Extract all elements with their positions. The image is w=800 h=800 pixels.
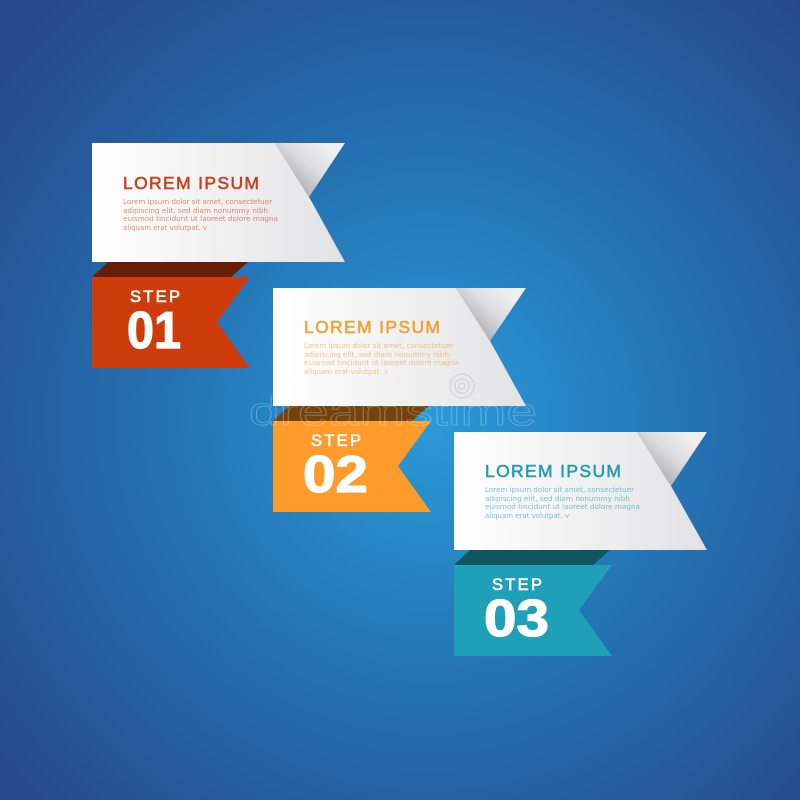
body text 02: euismod tincidunt ut laoreet dolore magna xyxy=(304,359,459,367)
card 03 xyxy=(454,432,707,550)
ribbon shadow 01 xyxy=(92,262,248,277)
heading 01: LOREM IPSUM xyxy=(123,173,259,193)
step number 02: 02 xyxy=(303,446,368,504)
step 03 group xyxy=(454,432,707,656)
watermark: dreamstime xyxy=(249,390,537,434)
body text 03: adipiscing elit, sed diam nonummy nibh xyxy=(485,495,630,503)
body text 01: aliquam erat volutpat. v xyxy=(123,224,207,232)
body text 01: Lorem ipsum dolor sit amet, consectetuer xyxy=(123,198,272,206)
body text 03 xyxy=(485,486,640,520)
body text 01: euismod tincidunt ut laoreet dolore magna xyxy=(123,215,278,223)
card 01 xyxy=(92,143,345,262)
ribbon 03 xyxy=(454,565,612,656)
step 02 group xyxy=(273,288,526,512)
step label 02: STEP xyxy=(311,432,361,450)
step 01 group xyxy=(92,143,345,368)
ribbon shadow 03 xyxy=(454,550,610,565)
step number 03: 03 xyxy=(484,590,549,648)
fold 02 xyxy=(456,288,526,341)
body text 02: Lorem ipsum dolor sit amet, consectetuer xyxy=(304,342,453,350)
ribbon 01 xyxy=(92,277,250,368)
fold 01 xyxy=(275,143,345,197)
card 02 xyxy=(273,288,526,406)
ribbon shadow 02 xyxy=(273,406,429,421)
step label 03: STEP xyxy=(492,576,542,594)
body text 01 xyxy=(123,198,278,232)
step label 01: STEP xyxy=(130,288,180,306)
body text 03: aliquam erat volutpat. v xyxy=(485,512,569,520)
ribbon 02 xyxy=(273,421,431,512)
body text 01: adipiscing elit, sed diam nonummy nibh xyxy=(123,207,268,215)
watermark xyxy=(249,374,537,434)
fold 03 xyxy=(637,432,707,486)
body text 02: adipiscing elit, sed diam nonummy nibh xyxy=(304,351,449,359)
body text 03: Lorem ipsum dolor sit amet, consectetuer xyxy=(485,486,634,494)
step number 01: 01 xyxy=(127,302,181,360)
body text 03: euismod tincidunt ut laoreet dolore magna xyxy=(485,503,640,511)
body text 02: aliquam erat volutpat. v xyxy=(304,368,388,376)
body text 02 xyxy=(304,342,459,376)
heading 02: LOREM IPSUM xyxy=(304,317,440,337)
heading 03: LOREM IPSUM xyxy=(485,461,621,481)
